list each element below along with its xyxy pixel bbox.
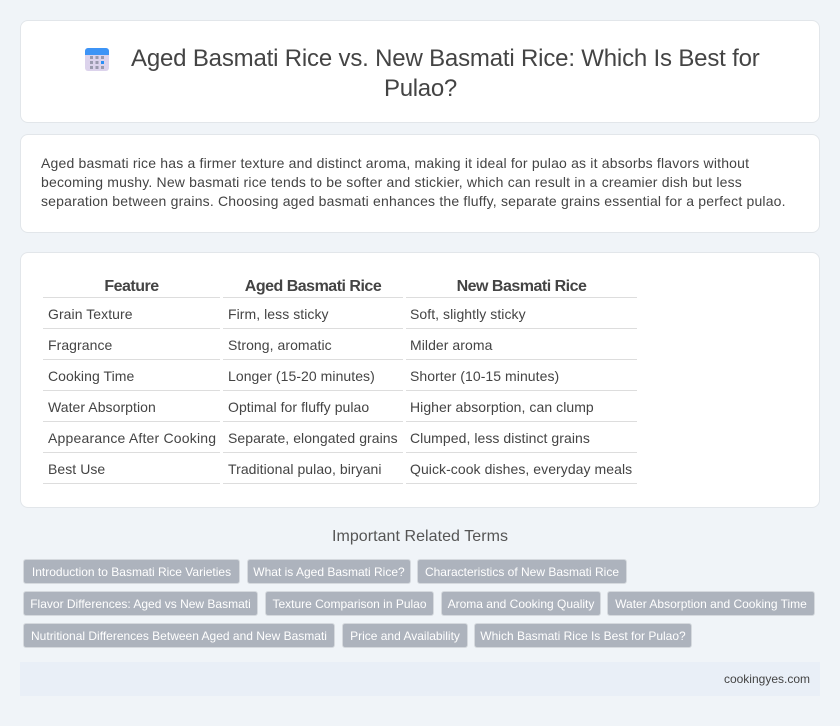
row: grain texture: Firm, less sticky	[228, 306, 329, 322]
intro text	[41, 155, 786, 209]
row: fragrance: Fragrance	[48, 337, 112, 353]
tag: Nutritional Differences Between Aged and New Basmati	[31, 629, 327, 643]
row: appearance after cooking: Appearance After Cooking	[48, 430, 216, 446]
panel: comparison table	[20, 252, 820, 508]
row: water absorption: Higher absorption, can clump	[410, 399, 594, 415]
tag: Water Absorption and Cooking Time	[615, 597, 807, 611]
tag: Which Basmati Rice Is Best for Pulao?	[480, 629, 686, 643]
tag	[607, 591, 815, 616]
table header row: New Basmati Rice	[457, 278, 586, 295]
tag: Aroma and Cooking Quality	[448, 597, 594, 611]
tag	[417, 559, 627, 584]
row: grain texture: Soft, slightly sticky	[410, 306, 526, 322]
tag: Price and Availability	[350, 629, 460, 643]
intro text: separation between grains. Choosing aged basmati enhances the fluffy, separate grains essential for a perfect pulao.	[41, 193, 786, 209]
tag: Introduction to Basmati Rice Varieties	[32, 565, 231, 579]
tag	[265, 591, 434, 616]
table header row	[43, 278, 637, 298]
intro text: Aged basmati rice has a firmer texture and distinct aroma, making it ideal for pulao as it absorbs flavors without	[41, 155, 749, 171]
table header row: Feature	[104, 278, 159, 295]
panel: header	[20, 20, 820, 123]
tag	[342, 623, 468, 648]
comparison table	[43, 278, 637, 484]
row: appearance after cooking	[43, 430, 637, 453]
panel: introduction	[20, 134, 820, 233]
tag	[23, 623, 335, 648]
row: water absorption: Water Absorption	[48, 399, 156, 415]
row: water absorption	[43, 399, 637, 422]
row: fragrance	[43, 337, 637, 360]
title: Aged Basmati Rice vs. New Basmati Rice: Which Is Best for	[131, 45, 760, 72]
related term tags	[23, 559, 815, 648]
tag: What is Aged Basmati Rice?	[253, 565, 405, 579]
tag	[247, 559, 411, 584]
row: best use	[43, 461, 637, 484]
row: best use: Quick-cook dishes, everyday meals	[410, 461, 632, 477]
title: Pulao?	[384, 75, 457, 102]
row: cooking time	[43, 368, 637, 391]
row: cooking time: Cooking Time	[48, 368, 134, 384]
row: best use: Traditional pulao, biryani	[228, 461, 382, 477]
row: grain texture	[43, 306, 637, 329]
row: fragrance: Milder aroma	[410, 337, 492, 353]
row: cooking time: Longer (15-20 minutes)	[228, 368, 375, 384]
row: water absorption: Optimal for fluffy pulao	[228, 399, 369, 415]
tag	[441, 591, 601, 616]
icon: calendar	[85, 48, 109, 71]
row: grain texture: Grain Texture	[48, 306, 133, 322]
row: appearance after cooking: Separate, elongated grains	[228, 430, 398, 446]
tag	[474, 623, 692, 648]
tag: Flavor Differences: Aged vs New Basmati	[30, 597, 251, 611]
tag: Texture Comparison in Pulao	[272, 597, 427, 611]
row: fragrance: Strong, aromatic	[228, 337, 332, 353]
title	[131, 45, 760, 102]
row: best use: Best Use	[48, 461, 105, 477]
intro text: becoming mushy. New basmati rice tends to be softer and stickier, which can result in a creamier dish but less	[41, 174, 742, 190]
footer source: cookingyes.com	[724, 672, 810, 686]
tag: Characteristics of New Basmati Rice	[425, 565, 619, 579]
tag	[23, 591, 258, 616]
footer bar	[20, 662, 820, 696]
row: cooking time: Shorter (10-15 minutes)	[410, 368, 559, 384]
heading: important related terms: Important Related Terms	[332, 528, 508, 545]
row: appearance after cooking: Clumped, less distinct grains	[410, 430, 590, 446]
table header row: Aged Basmati Rice	[245, 278, 381, 295]
tag	[23, 559, 240, 584]
